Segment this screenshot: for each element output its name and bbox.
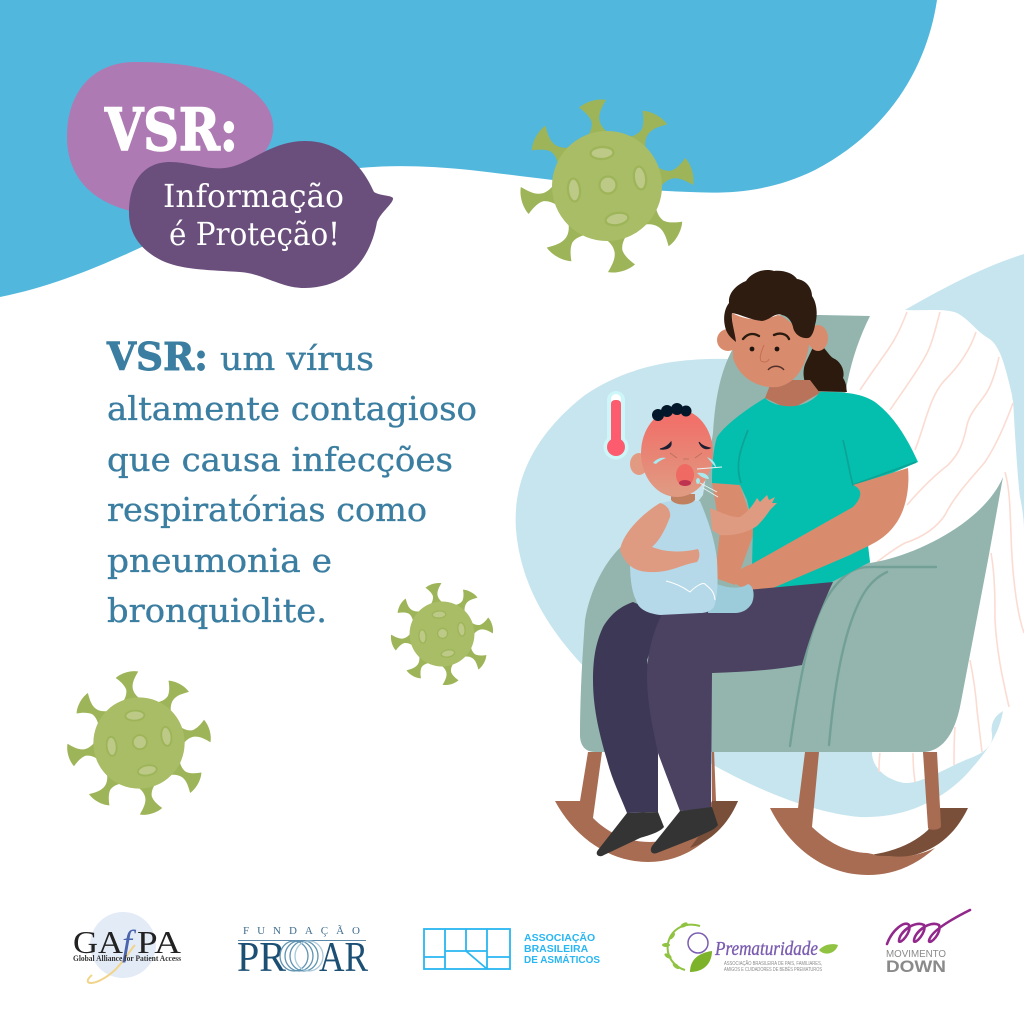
speech bubble: VSR	[67, 62, 273, 230]
logo: Associação Brasileira de Asmáticos	[424, 929, 600, 969]
logo: Fundação ProAR: AR	[319, 935, 368, 981]
body text: pneumonia e	[107, 541, 332, 580]
chair rocker left	[555, 750, 738, 862]
light blue blob behind illustration	[516, 359, 1003, 817]
body text: bronquiolite.	[107, 591, 327, 630]
baby diaper	[708, 582, 754, 613]
body text: altamente contagioso	[107, 389, 477, 428]
logo: GAfPA: Global Alliance for Patient Access	[73, 953, 182, 963]
mother shoes	[597, 807, 718, 856]
logo: GAfPA: GA	[73, 924, 123, 960]
mother right arm	[730, 468, 908, 590]
body text: respiratórias como	[107, 490, 427, 529]
blanket on the chair	[850, 310, 1024, 783]
baby neck	[671, 494, 695, 504]
speech bubble: Informação é Proteção: Informação	[163, 177, 344, 215]
logo: Prematuridade.com	[662, 921, 838, 973]
logo: Associação Brasileira de Asmáticos: DE ASMÁTICOS	[524, 953, 600, 966]
mother shirt sleeve folds	[738, 430, 916, 485]
baby vest	[630, 501, 718, 615]
logo: Prematuridade.com: ASSOCIAÇÃO BRASILEIRA DE PAIS, FAMILIARES,	[724, 960, 822, 967]
speech bubble: VSR: VSR:	[104, 96, 238, 164]
baby with fever	[604, 391, 777, 615]
baby far arm	[710, 495, 777, 535]
mother trousers front leg	[647, 582, 833, 811]
body text: VSR:	[106, 334, 208, 379]
baby hair	[652, 403, 692, 421]
speech bubble: Informação é Proteção: é Proteção!	[169, 215, 340, 253]
rocking chair	[555, 315, 1003, 875]
logo: Movimento Down	[886, 910, 970, 976]
logo: GAfPA: PA	[137, 924, 181, 960]
logo: Prematuridade.com: AMIGOS E CUIDADORES DE BEBÊS PREMATUROS	[724, 965, 822, 973]
mother	[593, 270, 918, 856]
logo: Prematuridade.com: Prematuridade	[714, 938, 818, 960]
logo: Associação Brasileira de Asmáticos: BRASILEIRA	[524, 943, 589, 955]
baby near arm	[620, 503, 699, 572]
logo: Associação Brasileira de Asmáticos: ASSOCIAÇÃO	[524, 931, 595, 944]
mother teal shirt	[712, 392, 918, 588]
mother ears	[717, 325, 828, 351]
top blue wave background	[0, 0, 937, 297]
logo: GAfPA: f	[122, 923, 137, 963]
body text: que causa infecções	[107, 440, 453, 479]
logo: GAfPA	[73, 912, 182, 983]
virus top	[518, 97, 696, 275]
mother face	[732, 313, 810, 387]
baby crying face	[653, 442, 722, 497]
baby ear	[630, 453, 648, 475]
thermometer icon	[604, 391, 628, 460]
mother dark trousers back leg	[593, 602, 663, 813]
light blue wedge top right	[905, 254, 1024, 530]
mother hair	[724, 270, 817, 342]
mother neck	[765, 380, 820, 410]
virus middle	[389, 581, 495, 687]
mother hair ponytail	[804, 343, 847, 392]
logo: Fundação ProAR: PR	[237, 935, 286, 981]
logo: Fundação ProAR	[237, 925, 368, 981]
speech bubble: Informação é Proteção	[129, 141, 393, 288]
chair arm lines	[790, 567, 936, 746]
mother left arm	[712, 483, 755, 585]
body text: um vírus	[220, 339, 374, 378]
baby head	[641, 409, 713, 497]
logo: Movimento Down: MOVIMENTO	[886, 949, 946, 960]
logo: Movimento Down: DOWN	[886, 957, 946, 976]
logo: Fundação ProAR: FUNDAÇÃO	[243, 925, 360, 937]
chair body	[580, 315, 1003, 752]
virus bottom left	[65, 669, 213, 817]
body text	[106, 334, 477, 630]
mother facial features	[743, 334, 789, 370]
chair rocker right	[770, 752, 968, 875]
